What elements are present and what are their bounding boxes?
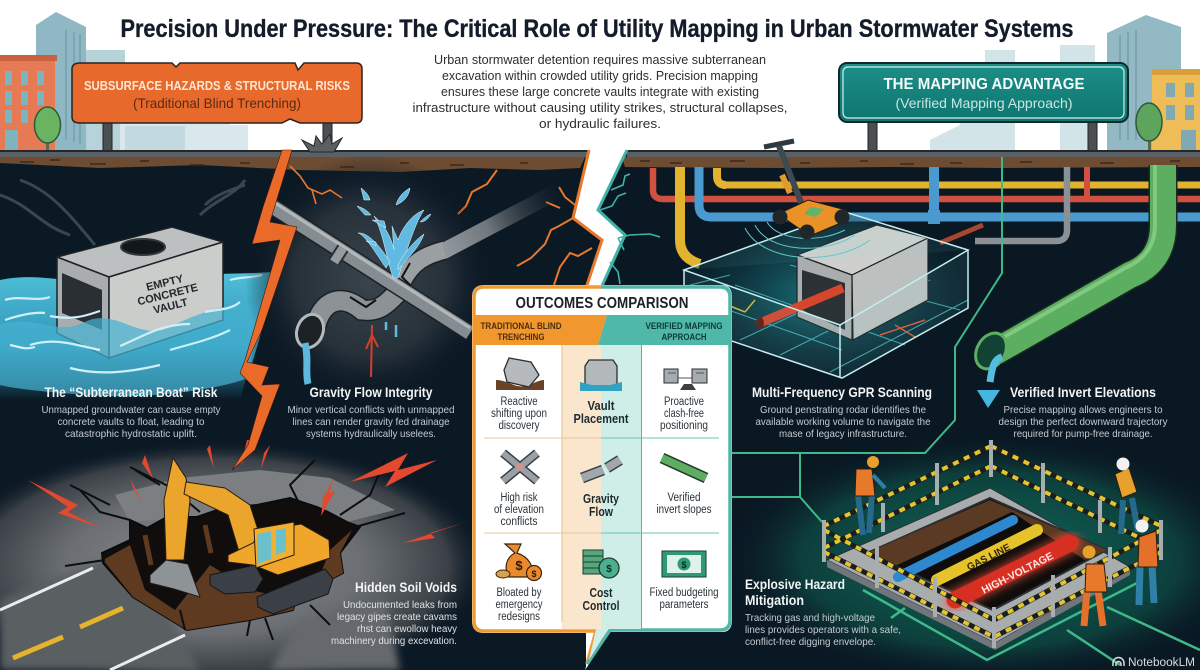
panel: explosive hazard mitigation — [720, 157, 1200, 670]
icon: concrete vault in scan — [756, 225, 983, 340]
body text — [756, 404, 931, 440]
pipe label: gas line: GAS LINE — [965, 542, 1013, 573]
sign: subsurface hazards — [72, 63, 362, 152]
body text: available working volume to navigate the — [756, 416, 931, 428]
skyline: left city — [0, 12, 248, 150]
panel heading: OUTCOMES COMPARISON — [516, 295, 688, 312]
row: vault placement: Vault — [588, 398, 615, 413]
icon: tilted vault — [496, 358, 544, 390]
orange edge of center split with cracks — [458, 150, 602, 288]
body text: catastrophic hydrostatic uplift. — [65, 428, 197, 440]
icon: water burst — [357, 188, 431, 278]
row: vault placement: discovery — [498, 420, 540, 432]
panel: subterranean boat risk — [0, 227, 275, 440]
scan grid — [690, 265, 968, 372]
dark underground: right half — [585, 150, 1200, 670]
row: vault placement: clash-free — [664, 408, 704, 420]
worker 1 — [855, 456, 885, 535]
column header: verified: APPROACH — [662, 332, 707, 343]
icon: empty concrete vault — [57, 227, 223, 358]
body text: concrete vaults to float, leading to — [58, 416, 205, 428]
column header: traditional: TRENCHING — [498, 332, 544, 343]
title: Precision Under Pressure: The Critical Role of Utility Mapping in Urban Stormwater Systems — [120, 15, 1074, 43]
row: gravity flow — [494, 453, 712, 528]
sign: mapping advantage — [839, 63, 1128, 152]
icon: coin stack — [583, 550, 619, 578]
icon: broken pipe — [582, 460, 620, 478]
panel frame — [472, 285, 732, 670]
worker 2 — [1115, 458, 1138, 534]
icon: money bag: $ — [531, 569, 537, 579]
row: cost control — [496, 544, 718, 623]
body text: design the perfect downward trajectory — [998, 416, 1168, 428]
watermark: NotebookLM: NotebookLM — [1128, 657, 1195, 669]
verified invert elevations text — [998, 384, 1168, 440]
row: gravity flow: of elevation — [494, 504, 544, 516]
icon: banknote — [662, 551, 706, 577]
row: cost control: redesigns — [498, 611, 540, 623]
orange lightning divider — [232, 150, 342, 470]
heading: Gravity Flow Integrity — [310, 384, 433, 400]
column header: verified: VERIFIED MAPPING — [646, 321, 722, 332]
panel: multi-frequency GPR scanning — [684, 141, 983, 440]
body text: legacy gipes create cavams — [337, 611, 457, 623]
icon: green pipe — [662, 458, 706, 478]
body text: Tracking gas and high-voltage — [745, 612, 875, 624]
body text: lines can render gravity fed drainage — [292, 416, 450, 428]
body text: lines provides operators with a safe, — [745, 624, 901, 636]
body text: machinery during excevation. — [331, 635, 457, 647]
body text — [288, 404, 455, 440]
column header: traditional: TRADITIONAL BLIND — [480, 321, 562, 332]
heading: Explosive Hazard — [745, 576, 845, 592]
dark underground: left half — [0, 134, 602, 670]
body text: rhst can ewollow heavy — [357, 623, 458, 635]
body text: conflict-free digging envelope. — [745, 636, 876, 648]
row: vault placement: shifting upon — [491, 408, 547, 420]
row: cost control: Control — [582, 598, 620, 613]
row: vault placement: positioning — [660, 420, 708, 432]
row: cost control: Fixed budgeting — [650, 587, 718, 599]
column header: verified — [598, 315, 730, 345]
heading: Mitigation — [745, 592, 804, 608]
icon: red sparks — [28, 440, 463, 543]
sign: subsurface hazards: SUBSURFACE HAZARDS & STRUCTURAL RISKS — [84, 78, 350, 93]
icon: money bag: $ — [515, 558, 523, 573]
panel: hidden soil voids — [0, 440, 490, 670]
row: vault placement — [491, 358, 708, 432]
row: vault placement: Placement — [574, 411, 629, 426]
body text: Undocumented leaks from — [343, 599, 457, 611]
icon: GPR cart — [745, 141, 870, 258]
caution tape fence — [824, 440, 1161, 648]
row: vault placement: Proactive — [664, 396, 704, 408]
sign: mapping advantage: (Verified Mapping Approach) — [896, 95, 1072, 111]
heading: Verified Invert Elevations — [1010, 384, 1156, 400]
heading — [745, 576, 845, 608]
body text — [745, 612, 901, 648]
excavation pit — [827, 488, 1130, 650]
body text: required for pump-free drainage. — [1014, 428, 1152, 440]
row: cost control: Bloated by — [496, 587, 542, 599]
body text: Minor vertical conflicts with unmapped — [288, 404, 455, 416]
skyline: right city — [930, 15, 1200, 150]
illustration: road markings — [0, 568, 185, 670]
sign: mapping advantage: THE MAPPING ADVANTAGE — [884, 76, 1085, 93]
row: gravity flow: Verified — [668, 492, 700, 504]
worker 3 — [1136, 520, 1158, 605]
icon: coin stack: $ — [606, 564, 612, 575]
intro paragraph: Urban stormwater detention requires massive subterranean — [434, 52, 766, 67]
body text: mase of legacy infrastructure. — [779, 428, 907, 440]
sign: subsurface hazards: (Traditional Blind Trenching) — [133, 95, 301, 111]
row: cost control: parameters — [660, 599, 709, 611]
row: gravity flow: Gravity — [583, 491, 620, 506]
illustration: crossing pipes and leak — [270, 190, 560, 384]
row: cost control: emergency — [496, 599, 543, 611]
panel: outcomes comparison — [472, 285, 732, 670]
icon: empty concrete vault: CONCRETE — [136, 282, 199, 308]
body text: Unmapped groundwater can cause empty — [42, 404, 221, 416]
worker 4 — [1082, 546, 1107, 626]
icon: clash-free blocks — [664, 369, 707, 390]
icon: money bag — [496, 544, 542, 580]
panel: gravity flow integrity — [245, 155, 560, 440]
body text — [331, 599, 458, 647]
body text: systems hydraulically uselees. — [306, 428, 436, 440]
icon: empty concrete vault: EMPTY — [145, 273, 185, 294]
heading: Multi-Frequency GPR Scanning — [752, 384, 932, 400]
workers — [855, 456, 1158, 626]
intro paragraph: ensures these large concrete vaults integrate with existing — [441, 84, 759, 99]
row: cost control: Cost — [590, 585, 613, 600]
body text — [998, 404, 1168, 440]
icon: banknote: $ — [681, 560, 687, 570]
intro paragraph: infrastructure without causing utility strikes, structural collapses, — [412, 100, 788, 115]
heading: Hidden Soil Voids — [355, 579, 457, 595]
intro paragraph: or hydraulic failures. — [539, 116, 661, 131]
illustration: pavement slabs — [115, 470, 395, 522]
icon: empty concrete vault: VAULT — [152, 297, 189, 317]
intro paragraph — [412, 52, 788, 131]
green circuit lines — [732, 157, 1200, 665]
row: gravity flow: Flow — [589, 504, 614, 519]
icon: excavator — [150, 458, 333, 614]
heading: The “Subterranean Boat” Risk — [44, 384, 218, 400]
body text: Precise mapping allows engineers to — [1004, 404, 1163, 416]
body text — [42, 404, 221, 440]
row: gravity flow: High risk — [500, 492, 538, 504]
body text: Ground penstrating rodar identifies the — [760, 404, 926, 416]
icon: crossing pipes — [503, 453, 537, 481]
illustration: sinkhole — [65, 460, 405, 640]
wireframe box — [684, 212, 968, 378]
icon: vault in water — [580, 360, 622, 391]
icon: green drainage pipe with arrow — [969, 165, 1163, 408]
row: gravity flow: invert slopes — [656, 504, 712, 516]
column header: traditional — [474, 315, 607, 345]
row: vault placement: Reactive — [500, 396, 538, 408]
row: gravity flow: conflicts — [500, 516, 538, 528]
intro paragraph: excavation within crowded utility grids. Precision mapping — [442, 68, 758, 83]
pipe label: high-voltage: HIGH-VOLTAGE — [980, 550, 1056, 597]
utility pipes network — [653, 167, 1200, 264]
